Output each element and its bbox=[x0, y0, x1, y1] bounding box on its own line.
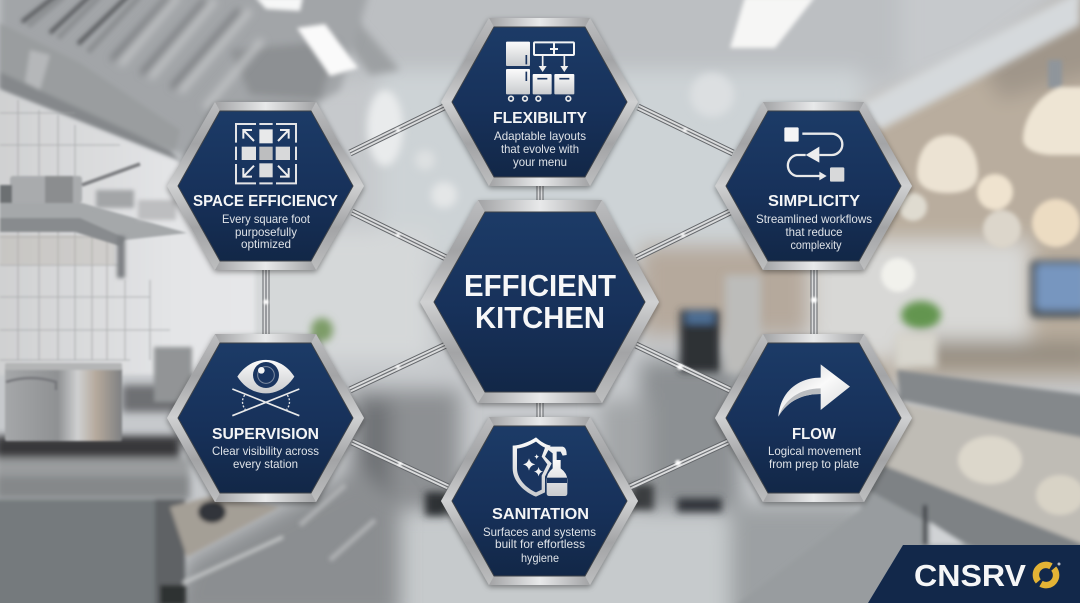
kitchen hood bbox=[0, 0, 370, 165]
ceiling beams bbox=[313, 0, 1080, 516]
text block bbox=[212, 444, 319, 471]
text block: Logical movement bbox=[768, 444, 862, 458]
icon: eye with sight lines bbox=[232, 360, 299, 416]
panel: flow bbox=[715, 334, 912, 502]
text block: complexity bbox=[790, 238, 842, 252]
text block: built for effortless bbox=[495, 537, 585, 551]
heading: SPACE EFFICIENCY bbox=[193, 193, 338, 210]
text block: that reduce bbox=[786, 225, 843, 239]
text block: from prep to plate bbox=[769, 457, 859, 471]
text block: Surfaces and systems bbox=[483, 525, 596, 539]
logo: CNSRV: CNSRV bbox=[914, 558, 1026, 593]
text block bbox=[494, 129, 586, 169]
text block: Adaptable layouts bbox=[494, 129, 586, 143]
heading: FLEXIBILITY bbox=[493, 110, 587, 127]
panel: space efficiency bbox=[167, 102, 364, 270]
panel: supervision bbox=[167, 334, 364, 502]
panel: flexibility bbox=[441, 18, 638, 186]
heading: SIMPLICITY bbox=[768, 193, 860, 210]
title: EFFICIENT bbox=[464, 268, 616, 303]
stove and pot bbox=[0, 347, 400, 603]
text block bbox=[222, 212, 311, 251]
panel: center hub bbox=[420, 200, 659, 403]
text block bbox=[483, 525, 596, 565]
heading: FLOW bbox=[792, 426, 837, 443]
text block: your menu bbox=[513, 155, 567, 169]
steel counter bbox=[730, 370, 1080, 603]
icon: logo ring bbox=[1036, 565, 1056, 585]
panel: sanitation bbox=[441, 417, 638, 585]
text block bbox=[756, 212, 872, 252]
wall screen bbox=[1030, 260, 1080, 318]
ceiling lights bbox=[255, 0, 815, 76]
icon: shield and spray bottle bbox=[513, 437, 567, 497]
equipment bbox=[680, 275, 761, 373]
text block: Streamlined workflows bbox=[756, 212, 872, 226]
icon: expanding grid bbox=[236, 124, 296, 183]
text block: Clear visibility across bbox=[212, 444, 319, 458]
heading: SUPERVISION bbox=[212, 426, 319, 443]
heading: SANITATION bbox=[492, 506, 589, 523]
shelf with pots bbox=[0, 164, 187, 278]
text block bbox=[768, 444, 862, 471]
text block: purposefully bbox=[235, 225, 297, 239]
logo: CNSRV bbox=[868, 545, 1080, 603]
pendant lamps and bokeh bbox=[881, 60, 1080, 292]
connector bars bbox=[264, 107, 817, 487]
plants bbox=[311, 301, 941, 368]
text block: that evolve with bbox=[501, 142, 579, 156]
title: KITCHEN bbox=[475, 300, 605, 335]
text block: Every square foot bbox=[222, 212, 311, 226]
tile wall bbox=[0, 88, 255, 375]
icon: streamlined workflow bbox=[784, 127, 844, 182]
icon: modular kitchen layout bbox=[506, 42, 574, 101]
text block: every station bbox=[233, 457, 298, 471]
text block: hygiene bbox=[521, 551, 559, 565]
icon: curved arrow bbox=[778, 364, 850, 417]
title bbox=[464, 268, 616, 335]
panel: simplicity bbox=[715, 102, 912, 270]
text block: optimized bbox=[241, 237, 291, 251]
